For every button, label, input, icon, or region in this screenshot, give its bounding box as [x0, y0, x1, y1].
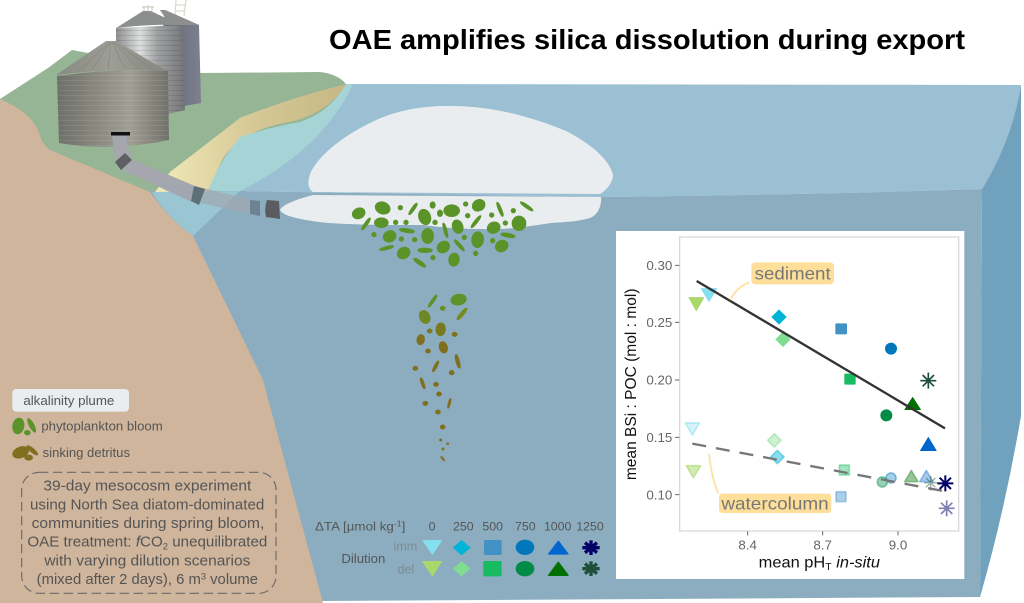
legend column values: 0 — [429, 520, 436, 534]
left legend — [11, 389, 276, 593]
shore: sand band — [155, 84, 346, 192]
legend: alkalinity plume — [12, 389, 129, 412]
alkalinity plume: upper white patch — [308, 106, 613, 194]
legend column values: 500 — [482, 520, 503, 534]
legend column values: 750 — [515, 520, 536, 534]
alkalinity plume: lower white patch — [280, 195, 601, 229]
plot frame — [680, 237, 959, 531]
sediment markers — [689, 289, 936, 451]
legend row labels: del — [397, 563, 414, 577]
regression line: watercolumn — [692, 444, 947, 492]
marker: 1250 immediate watercolumn — [939, 500, 955, 516]
panel background — [616, 231, 964, 579]
title: OAE amplifies silica dissolution during export — [329, 24, 965, 55]
x axis: 8.7 — [813, 538, 832, 553]
x axis: 8.4 — [738, 538, 758, 553]
experiment description callout: unequilibrated — [168, 535, 267, 551]
ocean: top surface — [240, 84, 1021, 197]
outflow pipe — [111, 132, 280, 219]
pipe: end collar — [250, 200, 260, 216]
leader: watercolumn — [709, 454, 718, 493]
pipe: outlet cap — [265, 200, 280, 219]
treatment legend — [315, 520, 604, 577]
pipe: neck — [112, 135, 132, 170]
x axis — [738, 531, 907, 573]
experiment description callout: 3 — [201, 571, 206, 581]
silo: back — [160, 10, 201, 106]
legend heading: delta TA: -1 — [394, 520, 402, 529]
label: watercolumn: watercolumn — [720, 493, 829, 513]
y axis: 0.30 — [646, 258, 672, 273]
land: green hillside — [0, 50, 346, 195]
alkalinity plume: subsurface aqua patch — [152, 191, 240, 236]
experiment description callout: OAE treatment: fCO — [27, 535, 162, 551]
silo: front — [56, 41, 169, 147]
ocean: front water column — [150, 189, 982, 601]
legend: sinking detritus — [11, 444, 131, 461]
experiment description callout: volume — [206, 572, 258, 588]
pipe: submerged section — [155, 181, 252, 214]
pipe: middle collar — [191, 186, 205, 205]
land: sandy coast cross-section — [0, 99, 323, 603]
y axis: mean BSi : POC (mol : mol) — [623, 288, 640, 480]
ladder — [175, 0, 186, 16]
leader: sediment — [730, 282, 749, 300]
pipe: elbow collar — [115, 153, 132, 170]
x axis: in-situ — [832, 554, 880, 571]
legend row labels: Dilution — [341, 552, 385, 566]
y axis: 0.15 — [646, 430, 672, 445]
y axis: 0.10 — [646, 487, 672, 502]
legend column values: 250 — [453, 520, 474, 534]
legend: sinking detritus: sinking detritus — [43, 445, 131, 460]
label: sediment: sediment — [755, 263, 831, 283]
regression line: sediment — [697, 281, 945, 428]
experiment description callout: using North Sea diatom-dominated — [30, 497, 264, 513]
experiment description callout: communities during spring bloom, — [32, 516, 264, 532]
experiment description callout: 39-day mesocosm experiment — [43, 479, 251, 495]
legend: phytoplankton bloom: phytoplankton bloom — [41, 418, 163, 433]
alkalinity plume: surface aqua patch — [208, 84, 353, 191]
silo: middle — [116, 5, 185, 115]
y axis — [623, 258, 679, 502]
legend symbols: immediate — [423, 540, 600, 555]
scatter plot panel — [616, 231, 964, 579]
experiment description callout: 2 — [163, 541, 168, 551]
x axis: 9.0 — [889, 538, 907, 553]
legend column values: 1000 — [544, 520, 572, 534]
marker: 1250 immediate sediment — [937, 475, 953, 491]
x axis: T — [825, 562, 832, 573]
legend column values: 1250 — [576, 520, 604, 534]
legend symbols: delayed — [423, 561, 600, 576]
legend row labels — [341, 539, 417, 577]
experiment description callout — [22, 472, 276, 593]
legend: alkalinity plume: alkalinity plume — [23, 393, 114, 408]
y axis: 0.25 — [646, 315, 672, 330]
pipe: black mouth — [111, 132, 130, 136]
sinking detritus — [413, 293, 468, 461]
watercolumn markers — [685, 423, 937, 502]
y axis: 0.20 — [646, 373, 672, 388]
experiment description callout: (mixed after 2 days), 6 m — [37, 572, 195, 588]
x axis: mean pH — [759, 554, 822, 571]
experiment description callout: with varying dilution scenarios — [43, 553, 250, 569]
legend: phytoplankton bloom — [11, 417, 163, 435]
silos — [56, 0, 201, 147]
legend heading: delta TA: ] — [402, 520, 405, 534]
ocean: right side face — [980, 85, 1021, 597]
legend heading: delta TA: ΔTA [µmol kg — [315, 520, 388, 534]
legend row labels: imm — [393, 539, 417, 553]
legend column values — [429, 520, 604, 534]
phytoplankton bloom — [351, 198, 533, 268]
pipe: land section — [122, 159, 195, 202]
